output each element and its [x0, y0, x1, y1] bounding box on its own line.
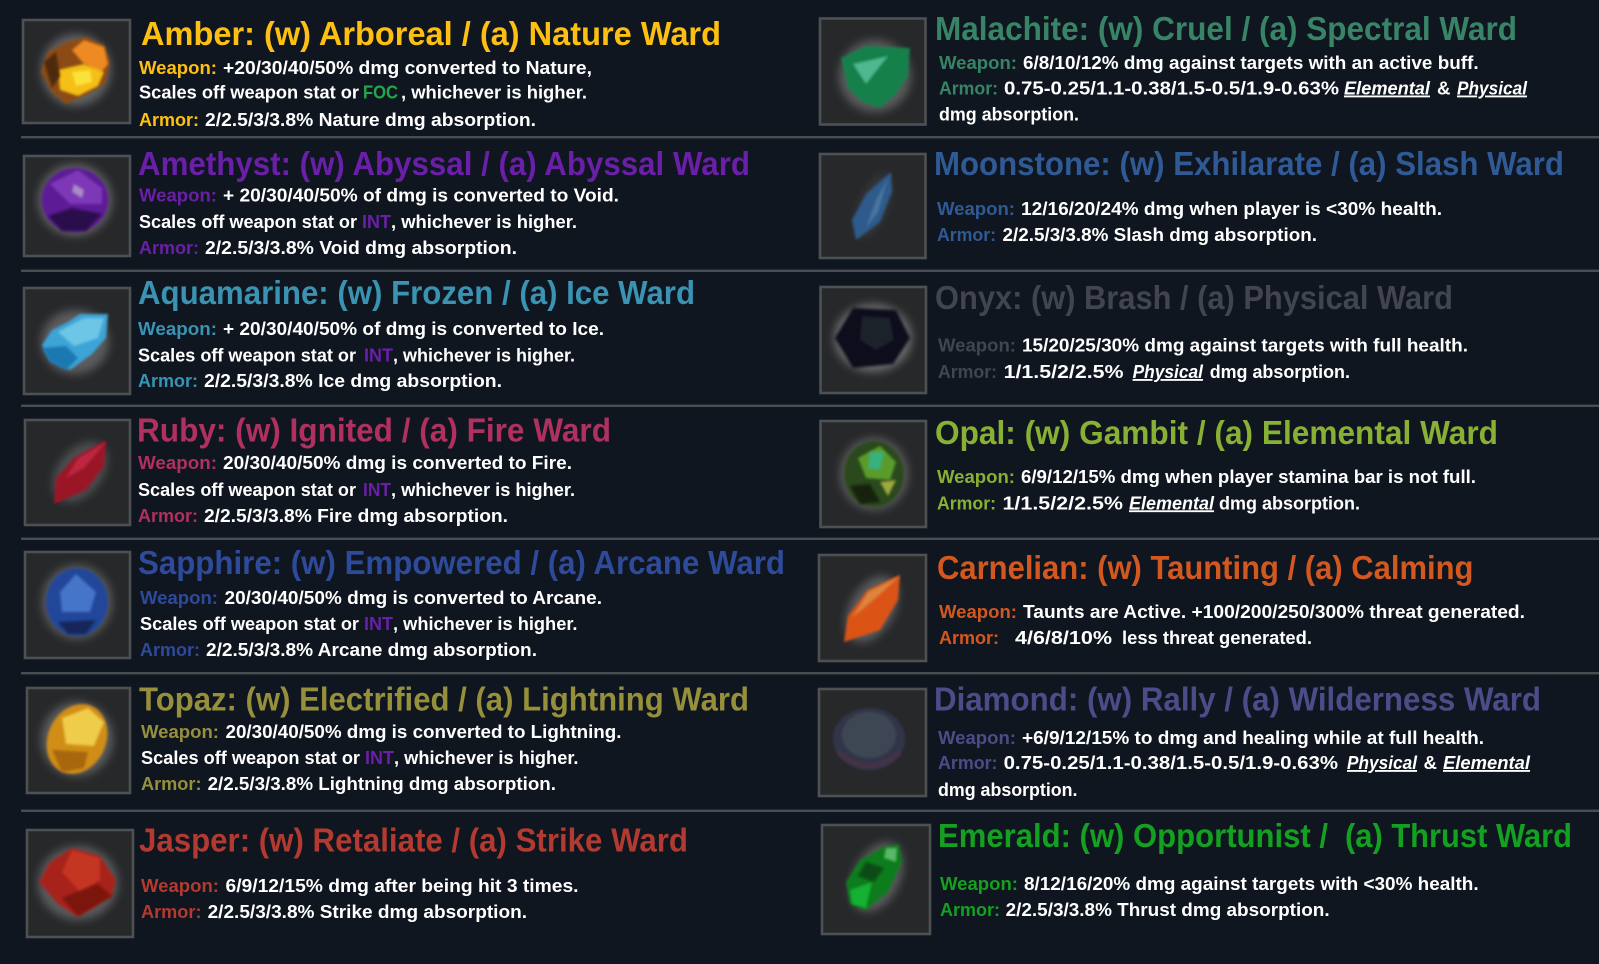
description: Amber: Weapon:: [139, 57, 217, 78]
description: Opal: 1/1.5/2/2.5%: [1002, 492, 1123, 513]
icon: malachite gem: [820, 18, 926, 124]
description: Diamond: Weapon:: [938, 727, 1016, 748]
title: Aquamarine: Aquamarine: (w) Frozen / (a) Ice Ward: [138, 274, 695, 311]
icon: diamond gem: [819, 689, 926, 796]
description: Ruby: Armor:: [138, 505, 198, 526]
title: Diamond: Diamond: (w) Rally / (a) Wilderness Ward: [934, 681, 1541, 718]
description: Onyx: 1/1.5/2/2.5%: [1004, 361, 1124, 382]
description: Moonstone: Armor:: [937, 224, 996, 245]
icon: emerald gem: [822, 825, 930, 934]
description: Amethyst: INT: [362, 211, 392, 232]
title: Emerald: Emerald: (w) Opportunist /: [938, 817, 1328, 854]
description: Amber: +20/30/40/50% dmg converted to Nature,: [223, 57, 592, 78]
description: Emerald: 2/2.5/3/3.8% Thrust dmg absorption.: [1006, 899, 1330, 920]
icon: amber gem: [23, 20, 130, 123]
title: Topaz: Topaz: (w) Electrified / (a) Lightning Ward: [139, 681, 749, 718]
description: Malachite: dmg absorption.: [939, 104, 1079, 125]
description: Ruby: 20/30/40/50% dmg is converted to Fire.: [223, 452, 572, 473]
description: Opal: Elemental: [1129, 492, 1215, 513]
description: Sapphire: INT: [364, 613, 394, 634]
description: Malachite: Armor:: [939, 78, 998, 98]
description: Jasper: 6/9/12/15% dmg after being hit 3 times.: [226, 875, 578, 896]
description: Jasper: 2/2.5/3/3.8% Strike dmg absorption.: [208, 901, 527, 922]
description: Opal: Weapon:: [937, 466, 1015, 487]
title: Amethyst: Amethyst: (w) Abyssal / (a) Abyssal Ward: [138, 145, 750, 182]
description: Amethyst: Armor:: [139, 237, 199, 258]
description: Emerald: Armor:: [940, 899, 1000, 920]
description: Ruby: [138, 452, 575, 526]
description: Malachite: Weapon:: [939, 52, 1017, 73]
title: Amber: Amber: (w) Arboreal / (a) Nature Ward: [141, 15, 721, 52]
gem row: Emerald: [822, 817, 1572, 934]
description: Amethyst: Scales off weapon stat or: [139, 211, 357, 232]
gem row: Topaz: [27, 681, 749, 794]
description: Topaz: INT: [365, 747, 395, 768]
description: Onyx: Armor:: [938, 361, 997, 382]
gem row: Sapphire: [25, 544, 785, 660]
description: Ruby: , whichever is higher.: [391, 479, 575, 500]
description: Topaz: Weapon:: [141, 721, 219, 742]
icon: moonstone gem: [820, 154, 926, 258]
description: Diamond: Physical: [1347, 752, 1418, 773]
icon: opal gem: [820, 421, 926, 527]
description: Malachite: &: [1437, 78, 1450, 98]
description: Aquamarine: INT: [364, 344, 394, 365]
icon: carnelian gem: [819, 555, 926, 661]
title: Jasper: Jasper: (w) Retaliate / (a) Strike Ward: [139, 822, 688, 859]
gem row: Amber: [23, 15, 721, 130]
description: Onyx: dmg absorption.: [1210, 361, 1350, 382]
title: Sapphire: Sapphire: (w) Empowered / (a) Arcane Ward: [138, 544, 785, 581]
description: Carnelian: Armor:: [939, 627, 999, 648]
description: Emerald: 8/12/16/20% dmg against targets with <30% health.: [1024, 873, 1479, 894]
description: Onyx: 15/20/25/30% dmg against targets with full health.: [1022, 335, 1468, 356]
description: Aquamarine: , whichever is higher.: [393, 344, 575, 365]
description: Topaz: [141, 721, 622, 794]
description: Sapphire: Armor:: [140, 639, 200, 660]
title: Carnelian: Carnelian: (w) Taunting / (a) Calming: [937, 549, 1474, 586]
description: Carnelian: Weapon:: [939, 601, 1017, 622]
gem row: Amethyst: [24, 145, 750, 258]
gem row: Aquamarine: [24, 274, 695, 394]
gem row: Moonstone: [820, 145, 1564, 258]
description: Opal: [937, 466, 1476, 513]
description: Jasper: Armor:: [141, 901, 202, 922]
description: Sapphire: [140, 587, 602, 660]
gem row: Ruby: [25, 412, 611, 526]
description: Amber: 2/2.5/3/3.8% Nature dmg absorption.: [205, 109, 536, 130]
description: Moonstone: [937, 198, 1442, 245]
description: Carnelian: 4/6/8/10%: [1015, 627, 1112, 648]
description: Amber: , whichever is higher.: [401, 82, 587, 103]
icon: onyx gem: [820, 287, 926, 393]
title: Emerald: (a) Thrust Ward: [1345, 817, 1572, 854]
description: Topaz: Scales off weapon stat or: [141, 747, 360, 768]
description: Jasper: [141, 875, 578, 922]
description: Amethyst: + 20/30/40/50% of dmg is converted to Void.: [223, 185, 619, 206]
icon: topaz gem: [27, 688, 130, 793]
title: Emerald: [938, 817, 1572, 854]
description: Moonstone: 2/2.5/3/3.8% Slash dmg absorption.: [1002, 224, 1317, 245]
description: Amber: Scales off weapon stat or: [139, 82, 359, 103]
description: Amber: [139, 57, 592, 130]
title: Onyx: Onyx: (w) Brash / (a) Physical Ward: [935, 279, 1453, 316]
gem row: Jasper: [27, 822, 688, 937]
description: Ruby: INT: [363, 479, 392, 500]
gem row: Onyx: [820, 279, 1468, 393]
description: Diamond: Armor:: [938, 752, 998, 773]
description: Diamond: [938, 727, 1531, 800]
description: Sapphire: 2/2.5/3/3.8% Arcane dmg absorption.: [206, 639, 537, 660]
description: Ruby: Scales off weapon stat or: [138, 479, 356, 500]
description: Malachite: [939, 52, 1528, 125]
icon: sapphire gem: [25, 552, 130, 658]
description: Amethyst: 2/2.5/3/3.8% Void dmg absorption.: [205, 237, 517, 258]
description: Aquamarine: Scales off weapon stat or: [138, 344, 356, 365]
description: Opal: Armor:: [937, 492, 996, 513]
description: Malachite: 6/8/10/12% dmg against targets with an active buff.: [1023, 52, 1479, 73]
description: Topaz: 2/2.5/3/3.8% Lightning dmg absorption.: [208, 773, 556, 794]
description: Aquamarine: Weapon:: [138, 318, 217, 339]
description: Diamond: dmg absorption.: [938, 779, 1078, 800]
description: Ruby: 2/2.5/3/3.8% Fire dmg absorption.: [204, 505, 508, 526]
gem row: Malachite: [820, 10, 1528, 125]
description: Topaz: , whichever is higher.: [394, 747, 578, 768]
title: Ruby: Ruby: (w) Ignited / (a) Fire Ward: [137, 412, 611, 449]
description: Onyx: Weapon:: [938, 335, 1016, 356]
gem row: Opal: [820, 414, 1498, 527]
description: Diamond: Elemental: [1443, 752, 1531, 773]
description: Diamond: &: [1424, 752, 1437, 773]
description: Aquamarine: [138, 318, 604, 391]
icon: jasper gem: [27, 830, 133, 937]
title: Moonstone: Moonstone: (w) Exhilarate / (a) Slash Ward: [934, 145, 1564, 182]
title: Malachite: Malachite: (w) Cruel / (a) Spectral Ward: [935, 10, 1517, 47]
description: Carnelian: less threat generated.: [1122, 627, 1312, 648]
description: Amber: Armor:: [139, 109, 199, 130]
icon: amethyst gem: [24, 156, 130, 256]
description: Emerald: [940, 873, 1479, 920]
description: Diamond: 0.75-0.25/1.1-0.38/1.5-0.5/1.9-0.63%: [1004, 752, 1338, 773]
description: Opal: 6/9/12/15% dmg when player stamina bar is not full.: [1021, 466, 1476, 487]
description: Moonstone: Weapon:: [937, 198, 1015, 219]
description: Carnelian: [939, 601, 1525, 648]
icon: aquamarine gem: [24, 288, 130, 394]
gem row: Diamond: [819, 681, 1541, 800]
description: Malachite: 0.75-0.25/1.1-0.38/1.5-0.5/1.9-0.63%: [1004, 78, 1339, 98]
description: Malachite: Elemental: [1344, 78, 1431, 98]
description: Amethyst: , whichever is higher.: [391, 211, 577, 232]
description: Moonstone: 12/16/20/24% dmg when player is <30% health.: [1021, 198, 1442, 219]
description: Carnelian: Taunts are Active. +100/200/250/300% threat generated.: [1023, 601, 1525, 622]
description: Aquamarine: 2/2.5/3/3.8% Ice dmg absorption.: [204, 370, 502, 391]
icon: ruby gem: [25, 420, 130, 525]
title: Opal: Opal: (w) Gambit / (a) Elemental Ward: [935, 414, 1498, 451]
description: Sapphire: 20/30/40/50% dmg is converted to Arcane.: [224, 587, 602, 608]
description: Jasper: Weapon:: [141, 875, 219, 896]
description: Topaz: Armor:: [141, 773, 202, 794]
description: Aquamarine: Armor:: [138, 370, 198, 391]
description: Onyx: Physical: [1133, 361, 1204, 382]
description: Sapphire: Weapon:: [140, 587, 218, 608]
description: Sapphire: Scales off weapon stat or: [140, 613, 359, 634]
description: Amber: FOC: [363, 82, 398, 103]
description: Opal: dmg absorption.: [1219, 492, 1360, 513]
description: Topaz: 20/30/40/50% dmg is converted to Lightning.: [226, 721, 622, 742]
description: Amethyst: Weapon:: [139, 185, 217, 206]
description: Emerald: Weapon:: [940, 873, 1018, 894]
description: Sapphire: , whichever is higher.: [393, 613, 578, 634]
description: Aquamarine: + 20/30/40/50% of dmg is converted to Ice.: [223, 318, 604, 339]
description: Amethyst: [139, 185, 619, 258]
description: Onyx: [938, 335, 1468, 382]
description: Diamond: +6/9/12/15% to dmg and healing while at full health.: [1022, 727, 1484, 748]
description: Ruby: Weapon:: [138, 452, 217, 473]
gem row: Carnelian: [819, 549, 1525, 661]
description: Malachite: Physical: [1457, 78, 1528, 98]
